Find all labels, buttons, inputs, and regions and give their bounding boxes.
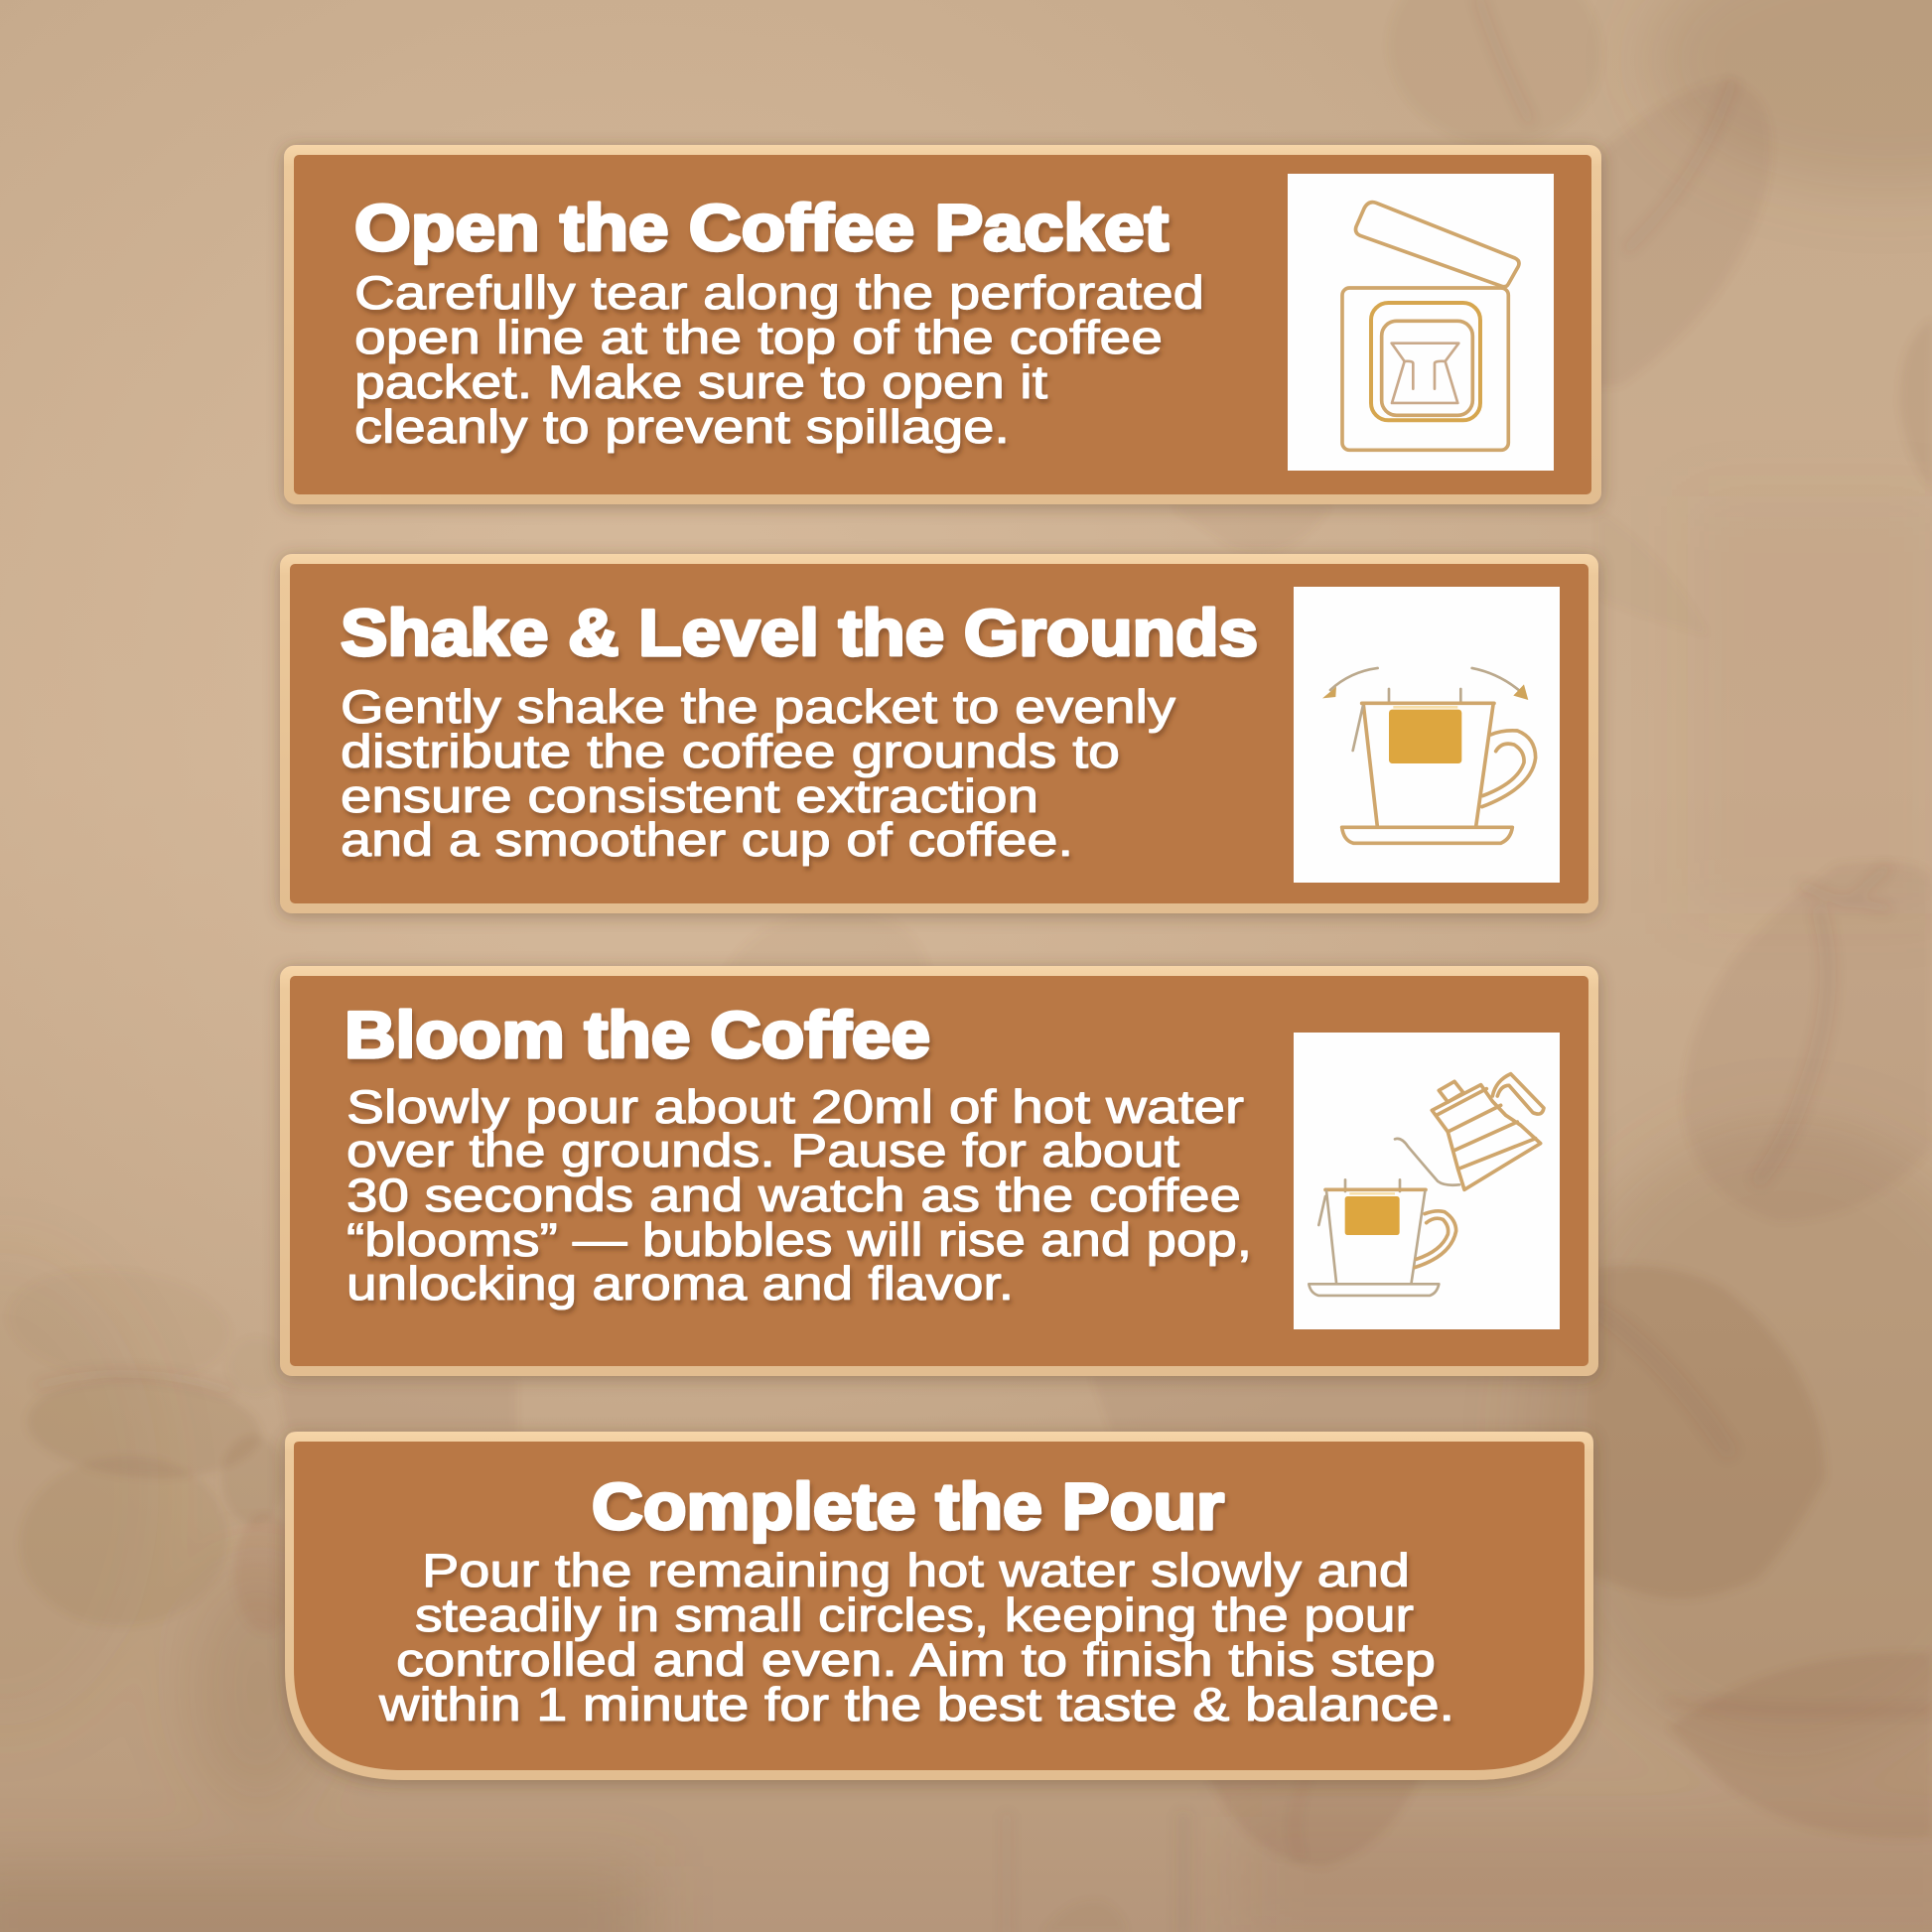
body text: controlled and even. Aim to finish this step — [396, 1633, 1436, 1686]
card background — [284, 145, 1601, 504]
body text — [346, 1080, 1252, 1310]
body text: over the grounds. Pause for about — [346, 1124, 1179, 1176]
panel: open the coffee packet — [284, 145, 1601, 504]
body text: within 1 minute for the best taste & balance. — [378, 1678, 1454, 1730]
body text: Gently shake the packet to evenly — [341, 680, 1176, 733]
body text: packet. Make sure to open it — [354, 355, 1047, 408]
body text: Carefully tear along the perforated — [354, 266, 1204, 319]
body text: “blooms” — bubbles will rise and pop, — [346, 1213, 1252, 1266]
card background — [280, 554, 1598, 913]
top right beans — [1373, 0, 1617, 161]
body text: open line at the top of the coffee — [354, 311, 1163, 363]
card background — [285, 1432, 1593, 1780]
right lower bean — [1588, 1265, 1825, 1598]
body text: unlocking aroma and flavor. — [346, 1257, 1014, 1310]
leaf — [1598, 511, 1708, 635]
body text: distribute the coffee grounds to — [341, 725, 1120, 777]
body text: 30 seconds and watch as the coffee — [346, 1169, 1241, 1221]
panel: complete the pour — [285, 1432, 1593, 1780]
panel: bloom the coffee — [280, 966, 1598, 1376]
heading: Bloom the Coffee — [345, 998, 930, 1071]
body text — [378, 1544, 1454, 1730]
right middle bean — [1683, 862, 1932, 1221]
gap beans — [725, 908, 928, 973]
heading: Shake & Level the Grounds — [341, 596, 1258, 669]
body text: Pour the remaining hot water slowly and — [422, 1544, 1410, 1596]
body text: Slowly pour about 20ml of hot water — [346, 1080, 1244, 1133]
bottom bean — [1204, 1767, 1424, 1866]
icon: cup with drip bag and shake arrows — [1294, 587, 1560, 883]
heading: Open the Coffee Packet — [354, 191, 1169, 264]
body text — [354, 266, 1204, 453]
body text — [341, 680, 1176, 866]
body text: and a smoother cup of coffee. — [341, 813, 1073, 866]
bottom right bean — [1668, 1653, 1932, 1838]
heading: Complete the Pour — [592, 1469, 1224, 1543]
icon: opened packet — [1288, 174, 1554, 471]
icon: kettle pouring into cup — [1294, 1033, 1560, 1329]
body text: ensure consistent extraction — [341, 769, 1038, 822]
body text: cleanly to prevent spillage. — [354, 400, 1010, 453]
left beans — [3, 1260, 235, 1391]
body text: steadily in small circles, keeping the pour — [415, 1588, 1414, 1641]
card background — [280, 966, 1598, 1376]
panel: shake and level the grounds — [280, 554, 1598, 913]
